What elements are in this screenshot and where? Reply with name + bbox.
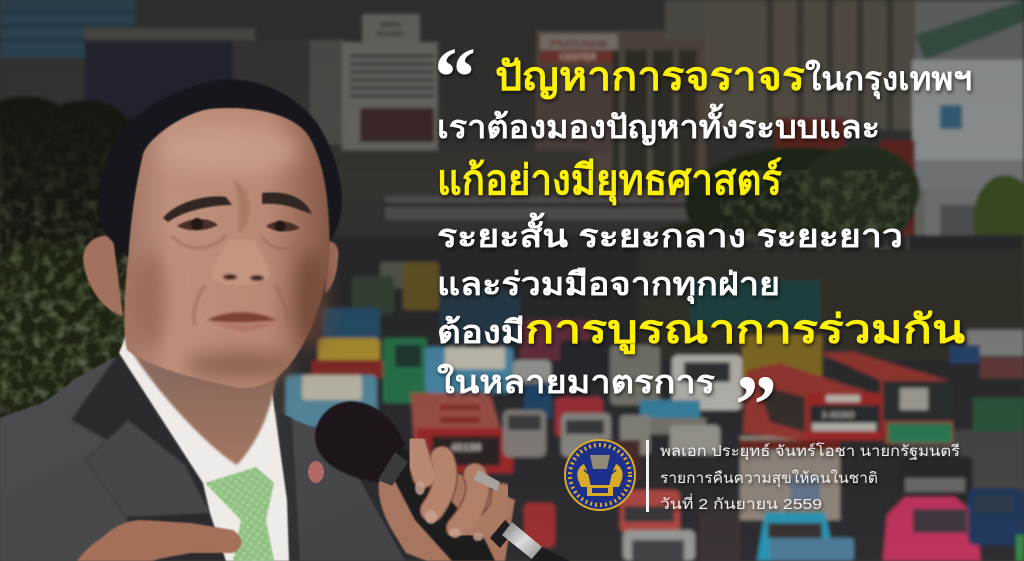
line 6	[437, 308, 965, 354]
line 2: เราต้องมองปัญหาทั้งระบบและ	[437, 103, 880, 146]
traffic: red bus 40198: 40198	[451, 442, 481, 454]
trees right	[640, 145, 1024, 276]
fingers	[414, 443, 503, 531]
foliage texture left	[0, 145, 132, 428]
line 6: ต้องมี	[437, 314, 525, 350]
government seal	[565, 440, 635, 510]
suit lapel face left	[86, 420, 210, 517]
line 5: และร่วมมือจากทุกฝ่าย	[437, 266, 780, 305]
mic neck ring	[378, 452, 408, 486]
opening quote mark: “	[434, 31, 476, 124]
face shading	[134, 125, 326, 379]
nasolabial folds	[194, 285, 287, 325]
traffic: far queue	[322, 262, 590, 360]
eyes	[177, 218, 300, 232]
line 4: ระยะสั้น ระยะกลาง ระยะยาว	[437, 212, 903, 254]
neck	[125, 320, 290, 465]
white shirt	[119, 335, 289, 561]
eye bags	[172, 235, 312, 249]
portrait: prime minister with microphone	[0, 79, 570, 561]
building: right facade	[705, 0, 1024, 300]
finger fill	[478, 495, 503, 531]
line 3: แก้อย่างมียุทธศาสตร์	[437, 157, 782, 206]
seal emblem	[577, 455, 623, 496]
traffic: white truck	[700, 436, 840, 561]
closing quote mark: ”	[735, 359, 777, 452]
hair	[97, 79, 342, 257]
building: Indra Regent tower	[310, 14, 438, 150]
traffic: right cars	[757, 456, 1024, 561]
building: dark billboard block	[85, 28, 323, 140]
microphone and right hand	[315, 401, 570, 561]
programme: รายการคืนความสุขให้คนในชาติ	[660, 469, 878, 488]
ears	[83, 236, 339, 316]
vertical divider	[646, 440, 649, 512]
nose	[212, 240, 270, 285]
ring	[474, 470, 500, 491]
source attribution	[660, 442, 960, 513]
line 1: ในกรุงเทพฯ	[805, 59, 972, 100]
traffic: red bus 40198	[411, 393, 513, 473]
building: left glass tower	[0, 0, 135, 103]
brow furrow	[232, 178, 250, 232]
lapel pin	[308, 461, 324, 483]
building: Pratunam Center	[536, 0, 775, 200]
line 1	[495, 55, 972, 100]
face	[124, 108, 330, 388]
mic metal band	[502, 522, 542, 560]
left hand pointing	[77, 520, 242, 561]
building: Indra Regent tower: REGENT	[376, 31, 406, 38]
line 7: ในหลายมาตรการ	[437, 363, 715, 400]
date: วันที่ 2 กันยายน 2559	[660, 493, 822, 513]
mouth	[207, 312, 277, 331]
overpass	[330, 118, 915, 270]
fingernails	[415, 481, 483, 541]
mic foam head	[315, 401, 405, 483]
line 1: ปัญหาการจราจร	[495, 55, 806, 100]
mic end	[530, 547, 570, 561]
speaker name: พลเอก ประยุทธ์ จันทร์โอชา นายกรัฐมนตรี	[660, 442, 960, 461]
suit lapel shadow left	[71, 353, 226, 561]
building: Indra Regent tower: INDRA	[380, 22, 402, 29]
line 6: การบูรณาการร่วมกัน	[525, 308, 965, 354]
building: Pratunam Center: CENTER	[559, 52, 597, 62]
suit lapel right	[277, 412, 300, 561]
foliage texture right	[720, 170, 910, 250]
trees left	[0, 96, 140, 433]
eyebrows	[163, 192, 312, 222]
tie	[205, 467, 274, 561]
street side right	[950, 330, 1024, 432]
mic collar	[490, 520, 515, 548]
building: Pratunam Center: PRATUNAM	[550, 39, 606, 50]
palm and thumb	[379, 460, 515, 561]
suit body	[0, 357, 405, 561]
traffic: central cars	[503, 340, 742, 561]
traffic: red buses	[740, 335, 953, 450]
mic grip	[385, 448, 495, 561]
traffic: red buses: 3-40360	[821, 410, 855, 420]
quote text block	[434, 31, 972, 452]
road and traffic base	[290, 235, 1024, 561]
traffic: yellow, green and teal buses	[285, 338, 513, 427]
